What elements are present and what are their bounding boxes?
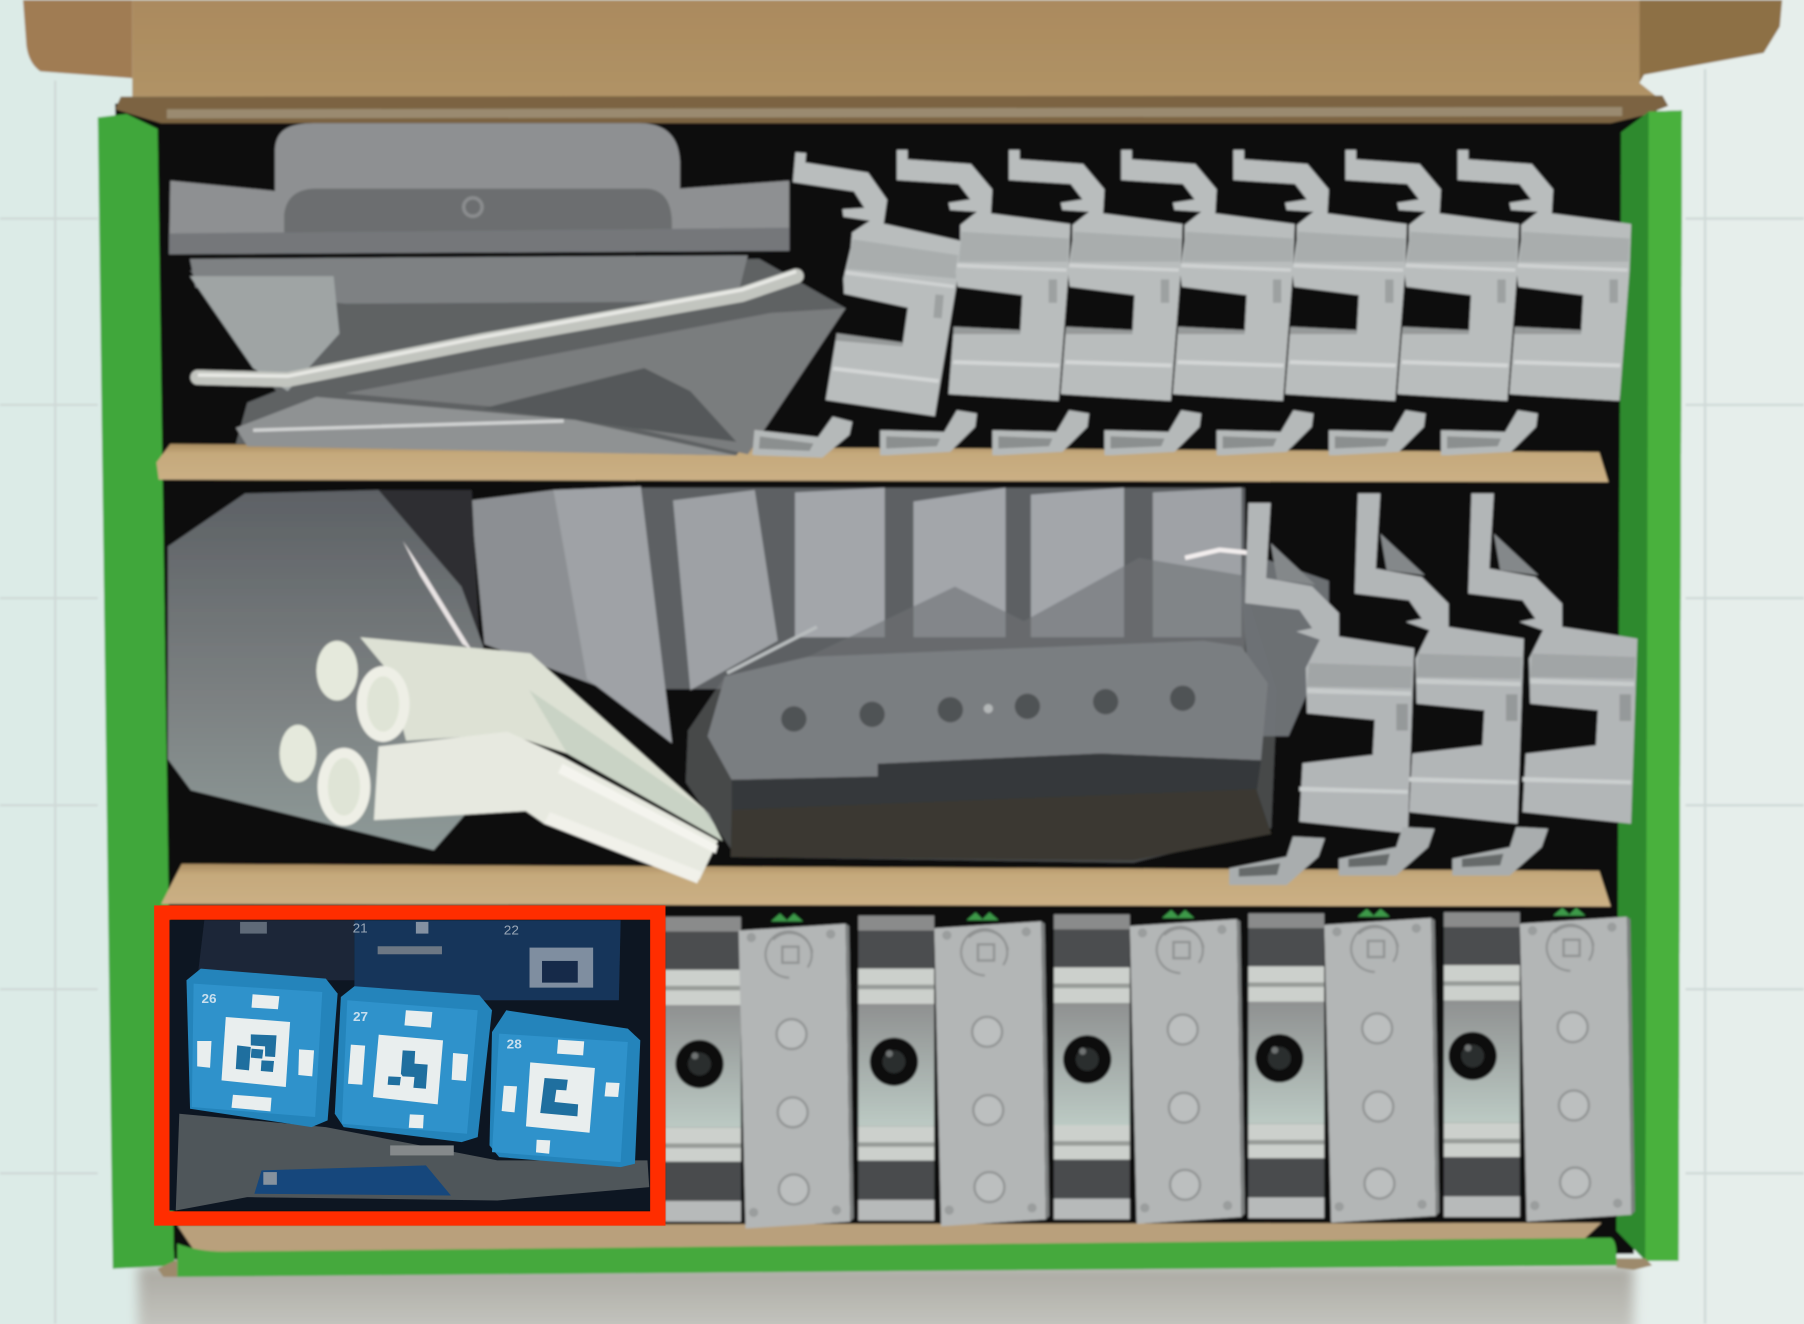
middle row: white bracket parts xyxy=(280,637,723,883)
cube bag backdrop: 22 xyxy=(504,923,519,937)
middle row: gray blocks xyxy=(471,487,1245,743)
cube bag backdrop: 21 xyxy=(353,921,368,935)
box interior xyxy=(115,101,1657,1260)
green wall: left xyxy=(98,114,175,1269)
cube 27: 27 xyxy=(353,1009,368,1024)
bottom row: screws xyxy=(675,1032,1497,1088)
bottom row: gray plates xyxy=(739,917,1635,1229)
cube 28: 28 xyxy=(507,1037,522,1052)
middle row: plastic bag left xyxy=(168,490,483,850)
cube 26 xyxy=(186,969,338,1127)
cube 28 xyxy=(490,1010,640,1167)
top row: bag with wrench xyxy=(190,255,846,456)
lid flap: cardboard xyxy=(23,0,1782,123)
green wall: right highlight xyxy=(1645,110,1682,1261)
cube 26: 26 xyxy=(201,991,217,1006)
green wall: right xyxy=(1616,110,1682,1261)
bottom row: green clips peeking out xyxy=(771,908,1585,921)
shelf: lower divider xyxy=(161,864,1611,906)
bottom row: gray rails xyxy=(665,912,1520,1222)
middle row: gray clips xyxy=(1229,493,1637,885)
top row: bottom hooks and gray clips xyxy=(752,150,1631,471)
middle row: dark gray plate with holes xyxy=(686,550,1277,863)
cube 27 xyxy=(335,986,492,1142)
corner cardboard xyxy=(158,1258,1652,1277)
red highlight frame xyxy=(162,913,658,1218)
green wall: bottom xyxy=(177,1238,1616,1277)
middle row: translucent bag behind plate xyxy=(1241,552,1329,736)
bottom cardboard xyxy=(177,1223,1602,1253)
cube bag backdrop xyxy=(169,920,650,1210)
highlighted blue cubes with markers xyxy=(162,913,658,1218)
shelf: upper divider xyxy=(156,444,1608,482)
top row: gray tray xyxy=(169,123,789,254)
